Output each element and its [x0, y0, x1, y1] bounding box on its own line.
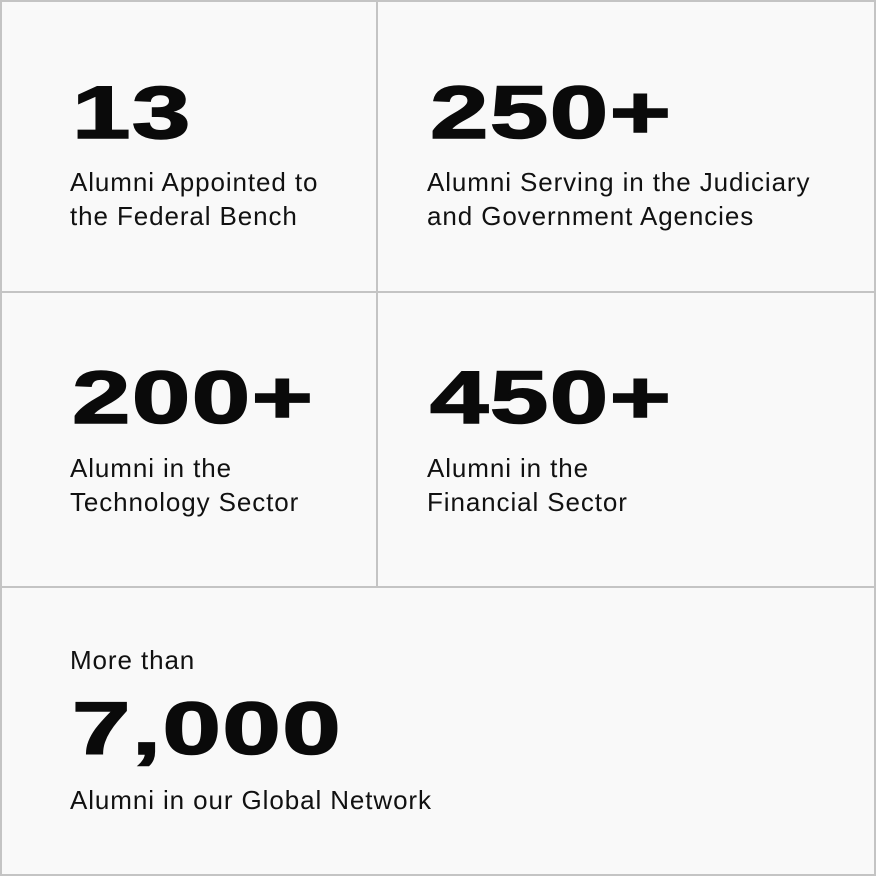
- label judiciary: [427, 167, 810, 231]
- panel: technology: [0, 291, 378, 588]
- label federal bench: [70, 167, 318, 231]
- label judiciary: and Government Agencies: [427, 201, 754, 231]
- label financial: Alumni in the: [427, 453, 589, 483]
- label technology: Alumni in the: [70, 453, 232, 483]
- label technology: [70, 453, 299, 517]
- panel: financial: [376, 291, 876, 588]
- label judiciary: Alumni Serving in the Judiciary: [427, 167, 810, 197]
- label financial: Financial Sector: [427, 487, 628, 517]
- label federal bench: the Federal Bench: [70, 201, 298, 231]
- number 450+: 450+: [430, 356, 672, 439]
- number 200+: 200+: [72, 356, 314, 439]
- number 13: 13: [72, 71, 192, 154]
- label financial: [427, 453, 628, 517]
- label more than: More than: [70, 645, 195, 675]
- number 250+: 250+: [430, 71, 672, 154]
- label federal bench: Alumni Appointed to: [70, 167, 318, 197]
- panel: global network: [0, 586, 876, 876]
- label global network: Alumni in our Global Network: [70, 785, 432, 815]
- panel: federal bench: [0, 0, 378, 293]
- number 7,000: 7,000: [72, 687, 342, 770]
- panel: judiciary: [376, 0, 876, 293]
- label technology: Technology Sector: [70, 487, 299, 517]
